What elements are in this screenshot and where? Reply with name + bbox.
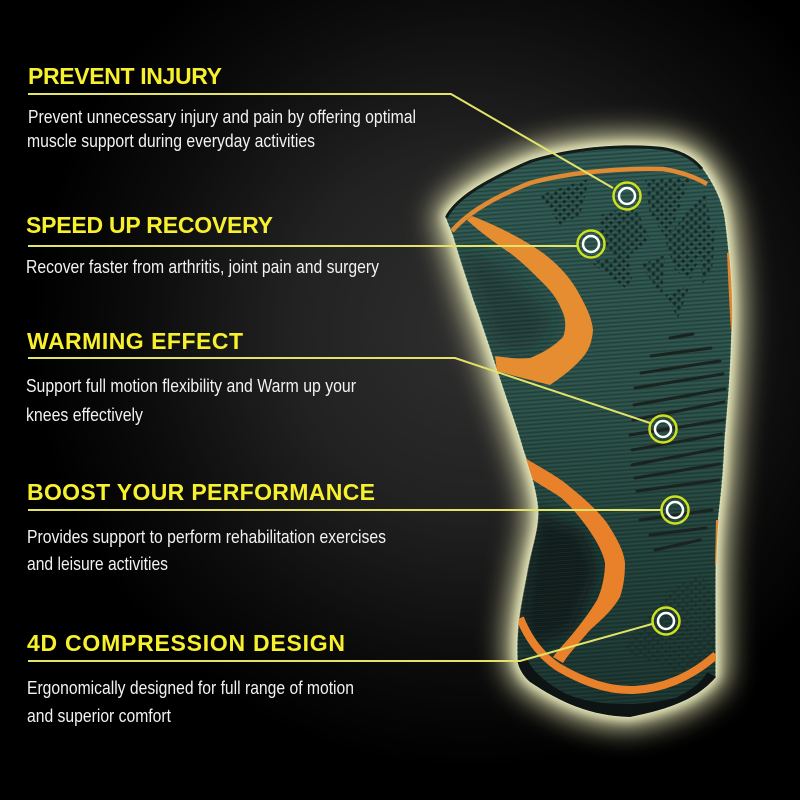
description: Support full motion flexibility and Warm up your [26,376,356,396]
lower checker pattern [620,575,714,672]
heading: 4D COMPRESSION DESIGN [27,630,345,656]
marker [662,496,688,524]
description: and superior comfort [27,706,171,726]
black top rim [445,145,703,217]
glow around sleeve [445,145,732,717]
heading: BOOST YOUR PERFORMANCE [27,479,375,505]
leader line [28,624,652,661]
description: Provides support to perform rehabilitation exercises [27,527,386,547]
description: knees effectively [26,405,143,425]
knee sleeve [430,130,740,730]
description: muscle support during everyday activities [27,131,315,151]
callout: warming effect [26,328,676,442]
marker [652,608,680,634]
heading: WARMING EFFECT [27,328,243,354]
description: and leisure activities [27,554,168,574]
callout: speed up recovery [26,212,604,277]
callout: 4d compression design [27,608,680,726]
knit ribs [445,145,732,716]
description [27,107,416,151]
dark inner panels [455,245,600,650]
description [26,376,356,425]
callout: prevent injury [27,63,640,210]
heading: PREVENT INJURY [28,63,222,89]
right edge orange [727,253,732,330]
black bottom rim [517,660,716,714]
leader line [28,245,577,247]
description [27,678,354,726]
leader line [28,509,661,511]
heading: SPEED UP RECOVERY [26,212,273,238]
sleeve texture and bands [445,145,732,717]
upper orange swoosh [467,216,593,385]
lower orange swoosh [525,458,625,663]
marker [578,230,604,258]
bottom orange band [520,618,716,690]
description [27,527,386,574]
sleeve body [445,145,732,717]
callout: boost your performance [27,479,688,574]
description: Prevent unnecessary injury and pain by offering optimal [28,107,416,127]
top orange band [452,169,707,231]
upper checker pattern [540,178,716,318]
marker [650,416,676,442]
horizontal dark stripes [630,334,725,550]
leader line [28,358,650,423]
leader line [28,94,613,188]
marker [614,182,640,210]
description: Ergonomically designed for full range of motion [27,678,354,698]
description: Recover faster from arthritis, joint pain and surgery [26,257,379,277]
